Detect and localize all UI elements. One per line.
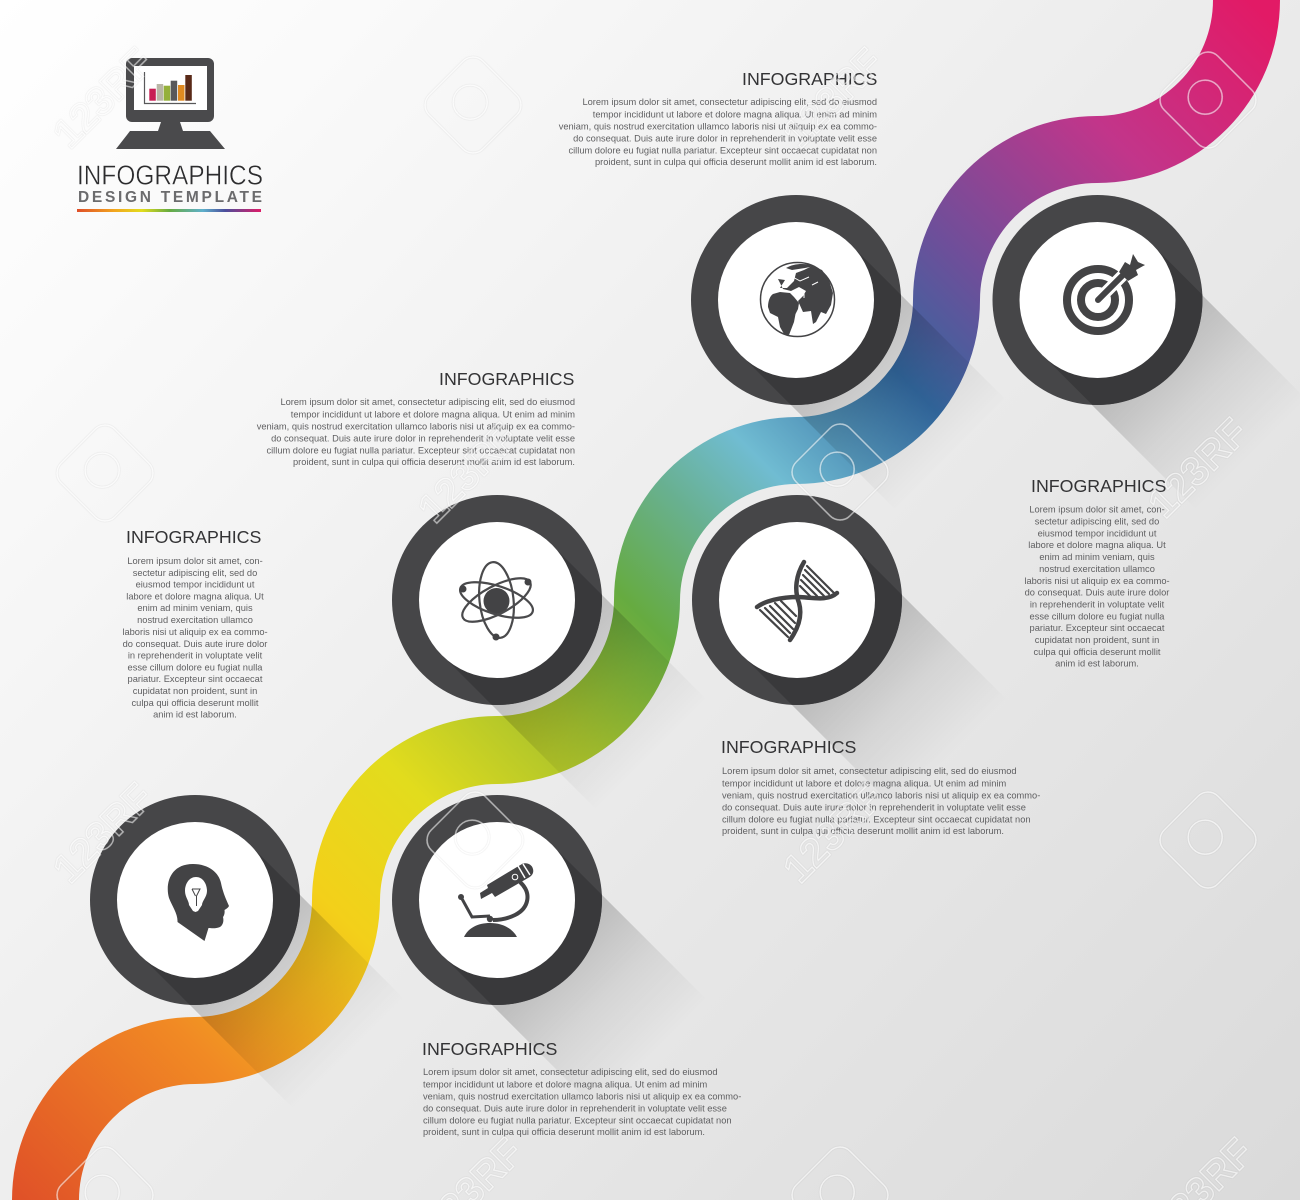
body text: Lorem ipsum dolor sit amet, consectetur adipiscing elit, sed do eiusmod (722, 766, 1017, 776)
body text: veniam, quis nostrud exercitation ullamco laboris nisi ut aliquip ex ea commo- (423, 1092, 741, 1102)
rainbow bar (77, 209, 261, 212)
icon: earth globe (760, 262, 834, 336)
icon: microscope (458, 863, 533, 937)
text block: far left (122, 527, 268, 720)
text block: bottom (422, 1039, 741, 1137)
heading: INFOGRAPHICS (126, 527, 261, 547)
body text: anim id est laborum. (1055, 658, 1139, 668)
body text: nostrud exercitation ullamco (1039, 564, 1155, 574)
step circle: head with light bulb (90, 795, 300, 1005)
heading: INFOGRAPHICS (742, 69, 877, 89)
icon: computer monitor with bar chart (116, 58, 225, 149)
body text: in reprehenderit in voluptate velit (1030, 600, 1165, 610)
logo subtitle: DESIGN TEMPLATE (78, 189, 262, 206)
body text: culpa qui officia deserunt mollit (1034, 647, 1161, 657)
text block: middle left upper (257, 369, 575, 467)
text block: middle right lower (721, 737, 1040, 836)
step circle: target with arrow (992, 195, 1202, 405)
body text: sectetur adipiscing elit, sed do (133, 568, 257, 578)
text block: far right (1024, 476, 1170, 668)
body text: proident, sunt in culpa qui officia deserunt mollit anim id est laborum. (293, 457, 575, 467)
heading: INFOGRAPHICS (1031, 476, 1166, 496)
body text: cillum dolore eu fugiat nulla pariatur. Excepteur sint occaecat cupidatat non (722, 814, 1031, 824)
long shadows of the circles (190, 295, 1300, 1165)
step circle: atom (392, 495, 602, 705)
body text: labore et dolore magna aliqua. Ut (126, 592, 264, 602)
body text: proident, sunt in culpa qui officia deserunt mollit anim id est laborum. (423, 1127, 705, 1137)
body text: esse cillum dolore eu fugiat nulla (1030, 612, 1165, 622)
body text: proident, sunt in culpa qui officia deserunt mollit anim id est laborum. (595, 157, 877, 167)
icon: atom (456, 560, 537, 640)
watermark overlay: 123RF (1140, 410, 1256, 526)
body text: laboris nisi ut aliquip ex ea commo- (122, 627, 268, 637)
heading: INFOGRAPHICS (439, 369, 574, 389)
body text: do consequat. Duis aute irure dolor in reprehenderit in voluptate velit esse (271, 434, 575, 444)
body text: Lorem ipsum dolor sit amet, consectetur adipiscing elit, sed do eiusmod (280, 397, 575, 407)
body text: labore et dolore magna aliqua. Ut (1028, 540, 1166, 550)
body text: do consequat. Duis aute irure dolor in reprehenderit in voluptate velit esse (573, 134, 877, 144)
body text: eiusmod tempor incididunt ut (136, 580, 255, 590)
logo: infographics design template (77, 58, 263, 212)
body text: laboris nisi ut aliquip ex ea commo- (1024, 576, 1170, 586)
body text: nostrud exercitation ullamco (137, 615, 253, 625)
step circle: microscope (392, 795, 602, 1005)
body text (122, 556, 268, 720)
body text: veniam, quis nostrud exercitation ullamco laboris nisi ut aliquip ex ea commo- (559, 122, 877, 132)
body text: tempor incididunt ut labore et dolore magna aliqua. Ut enim ad minim (423, 1080, 707, 1090)
text block: top (559, 69, 877, 167)
body text: pariatur. Excepteur sint occaecat (1030, 623, 1165, 633)
body text: in reprehenderit in voluptate velit (128, 650, 263, 660)
body text (423, 1067, 741, 1137)
logo title: INFOGRAPHICS (77, 160, 263, 190)
body text (559, 97, 877, 167)
body text: pariatur. Excepteur sint occaecat (128, 674, 263, 684)
body text: eiusmod tempor incididunt ut (1038, 528, 1157, 538)
icon: dna helix (757, 562, 837, 640)
body text: anim id est laborum. (153, 710, 237, 720)
body text: tempor incididunt ut labore et dolore magna aliqua. Ut enim ad minim (593, 110, 877, 120)
body text: proident, sunt in culpa qui officia deserunt mollit anim id est laborum. (722, 826, 1004, 836)
body text: do consequat. Duis aute irure dolor in reprehenderit in voluptate velit esse (722, 802, 1026, 812)
watermark overlay: 123RF (45, 775, 161, 891)
body text: enim ad minim veniam, quis (1039, 552, 1155, 562)
heading: INFOGRAPHICS (422, 1039, 557, 1059)
body text: do consequat. Duis aute irure dolor in reprehenderit in voluptate velit esse (423, 1104, 727, 1114)
body text: Lorem ipsum dolor sit amet, consectetur adipiscing elit, sed do eiusmod (582, 97, 877, 107)
body text (257, 397, 575, 467)
heading: INFOGRAPHICS (721, 737, 856, 757)
body text (722, 766, 1040, 836)
body text: cillum dolore eu fugiat nulla pariatur. Excepteur sint occaecat cupidatat non (266, 446, 575, 456)
body text: Lorem ipsum dolor sit amet, con- (127, 556, 263, 566)
icon: target with arrow (1067, 254, 1145, 331)
body text: culpa qui officia deserunt mollit (132, 698, 259, 708)
body text: enim ad minim veniam, quis (137, 603, 253, 613)
body text: esse cillum dolore eu fugiat nulla (128, 662, 263, 672)
body text: cupidatat non proident, sunt in (133, 686, 257, 696)
body text: sectetur adipiscing elit, sed do (1035, 516, 1159, 526)
body text: cupidatat non proident, sunt in (1035, 635, 1159, 645)
watermark overlay: 123RF (45, 40, 161, 156)
body text: Lorem ipsum dolor sit amet, con- (1029, 504, 1165, 514)
body text: Lorem ipsum dolor sit amet, consectetur adipiscing elit, sed do eiusmod (423, 1067, 718, 1077)
body text: cillum dolore eu fugiat nulla pariatur. Excepteur sint occaecat cupidatat non (423, 1116, 732, 1126)
body text: tempor incididunt ut labore et dolore magna aliqua. Ut enim ad minim (291, 410, 575, 420)
body text: tempor incididunt ut labore et dolore magna aliqua. Ut enim ad minim (722, 778, 1006, 788)
body text: cillum dolore eu fugiat nulla pariatur. Excepteur sint occaecat cupidatat non (568, 146, 877, 156)
watermark overlay: 123RF (775, 40, 891, 156)
icon: head with light bulb (168, 864, 229, 941)
body text (1024, 504, 1170, 668)
body text: veniam, quis nostrud exercitation ullamco laboris nisi ut aliquip ex ea commo- (257, 422, 575, 432)
watermark overlay: 123RF (410, 415, 526, 531)
step circle: dna (692, 495, 902, 705)
body text: veniam, quis nostrud exercitation ullamco laboris nisi ut aliquip ex ea commo- (722, 790, 1040, 800)
body text: do consequat. Duis aute irure dolor (1025, 588, 1169, 598)
body text: do consequat. Duis aute irure dolor (123, 639, 267, 649)
watermark overlay: 123RF (775, 775, 891, 891)
step circle: globe (691, 195, 901, 405)
